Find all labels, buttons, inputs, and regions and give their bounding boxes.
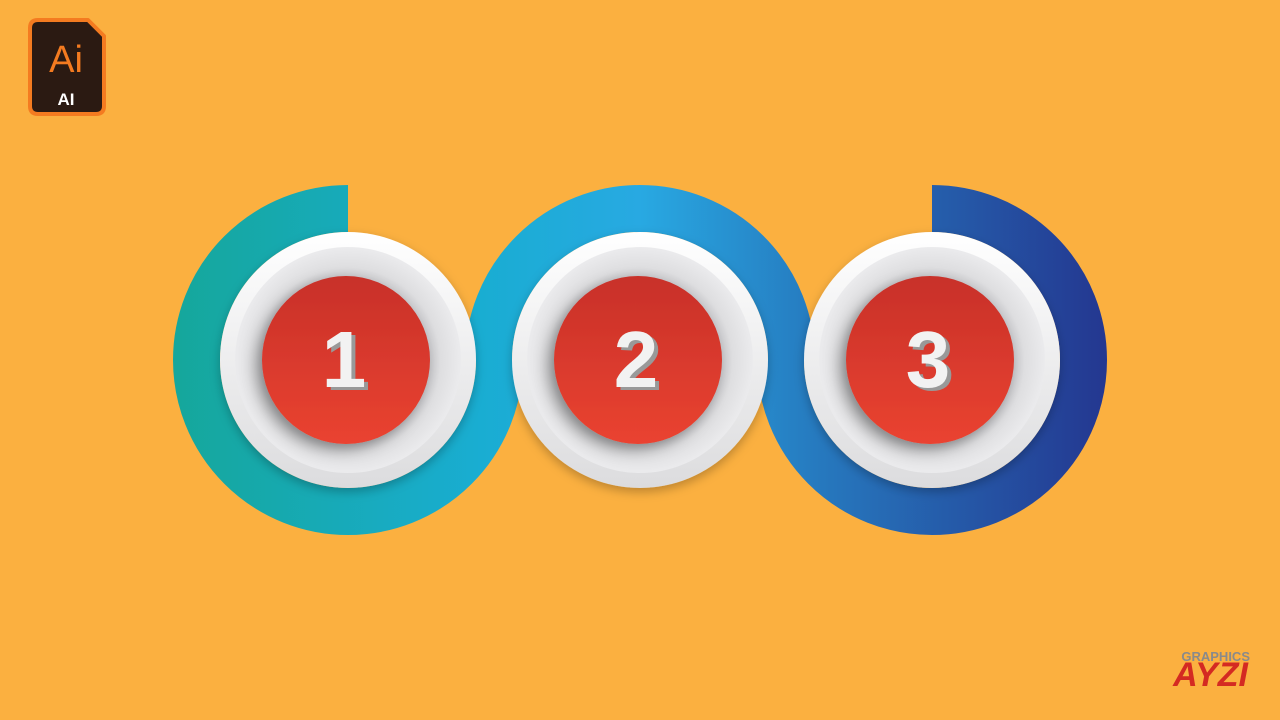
icon: Adobe Illustrator <box>30 20 104 114</box>
logo: Ayzi Graphics: AYZI <box>1172 656 1250 694</box>
logo: Ayzi Graphics: GRAPHICS <box>1181 649 1250 664</box>
step 3: 3 <box>910 318 954 407</box>
step 2: 2 <box>614 315 658 404</box>
icon: Adobe Illustrator: AI <box>58 90 74 109</box>
icon: Adobe Illustrator: Ai <box>49 39 83 81</box>
step 2 <box>512 232 768 488</box>
step 3 <box>804 232 1060 488</box>
step 1: 1 <box>322 315 366 404</box>
step 2: 2 <box>618 318 662 407</box>
gradient rings <box>196 208 1084 512</box>
step 3: 3 <box>906 315 950 404</box>
step 1: 1 <box>326 318 370 407</box>
step 1 <box>220 232 476 488</box>
